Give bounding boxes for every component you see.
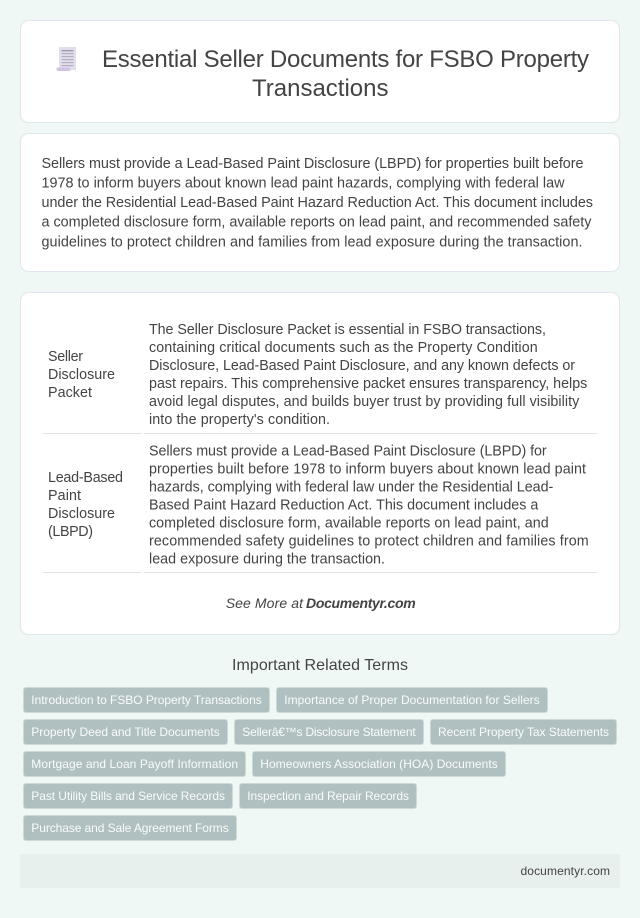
row label: (LBPD) <box>48 524 93 540</box>
tag <box>24 752 246 776</box>
see more link: See More at <box>226 595 304 611</box>
row: lead-based paint disclosure <box>48 443 589 567</box>
row description: containing critical documents such as the Property Condition <box>149 340 538 356</box>
tag: Past Utility Bills and Service Records <box>31 789 225 803</box>
row description: Sellers must provide a Lead-Based Paint Disclosure (LBPD) for <box>149 443 547 459</box>
row: seller disclosure packet <box>48 322 587 428</box>
text block: intro paragraph: a completed disclosure form, available reports on lead paint, and recommended safety <box>42 215 592 231</box>
tag <box>430 720 616 744</box>
row label: Seller <box>48 349 83 365</box>
tag <box>24 784 232 808</box>
panel: document table <box>20 292 620 634</box>
panel: intro <box>20 134 620 272</box>
footer <box>20 854 620 888</box>
see more link <box>226 595 416 611</box>
text block: intro paragraph: guidelines to protect children and families from lead exposure during the transaction. <box>42 234 582 250</box>
panel: header <box>20 20 620 122</box>
tag <box>24 816 236 840</box>
see more link: Documentyr.com <box>306 595 416 611</box>
row description: The Seller Disclosure Packet is essential in FSBO transactions, <box>149 322 546 338</box>
row label: Disclosure <box>48 506 115 522</box>
row description: hazards, complying with federal law under the Residential Lead- <box>149 479 554 495</box>
row label <box>48 470 123 540</box>
row description: recommended safety guidelines to protect children and families from <box>149 533 589 549</box>
row label: Paint <box>48 488 81 504</box>
tag: Homeowners Association (HOA) Documents <box>260 757 498 771</box>
text block: intro paragraph <box>42 156 593 250</box>
row label: Disclosure <box>48 367 115 383</box>
tag: Introduction to FSBO Property Transactions <box>31 693 262 707</box>
tag <box>252 752 506 776</box>
tag <box>24 720 228 744</box>
row description <box>149 322 587 428</box>
text block: intro paragraph: Sellers must provide a Lead-Based Paint Disclosure (LBPD) for properties built before <box>42 156 584 172</box>
row description: completed disclosure form, available reports on lead paint, and <box>149 515 549 531</box>
tag <box>234 720 424 744</box>
tag: Recent Property Tax Statements <box>438 725 609 739</box>
panel: related term tags <box>24 688 616 840</box>
tag: Mortgage and Loan Payoff Information <box>31 757 238 771</box>
tag: Inspection and Repair Records <box>247 789 409 803</box>
row label: Packet <box>48 385 92 401</box>
row description: Disclosure, Lead-Based Paint Disclosure, and any known defects or <box>149 358 575 374</box>
title: Essential Seller Documents for FSBO Property <box>102 46 589 73</box>
tag <box>276 688 548 712</box>
tag: Sellerâ€™s Disclosure Statement <box>242 725 416 739</box>
row description: lead exposure during the transaction. <box>149 551 385 567</box>
heading: important related terms: Important Related Terms <box>232 657 408 674</box>
tag: Property Deed and Title Documents <box>31 725 220 739</box>
row description: into the property's condition. <box>149 412 330 428</box>
row description: properties built before 1978 to inform buyers about known lead paint <box>149 461 586 477</box>
row description: past repairs. This comprehensive packet ensures transparency, helps <box>149 376 587 392</box>
icon: document scroll <box>56 47 76 71</box>
text block: intro paragraph: under the Residential Lead-Based Paint Hazard Reduction Act. This document includes <box>42 195 593 211</box>
tag <box>240 784 416 808</box>
row label <box>48 349 115 401</box>
row description <box>149 443 589 567</box>
title <box>102 46 589 102</box>
footer text: documentyr.com <box>520 864 610 878</box>
tag: Purchase and Sale Agreement Forms <box>31 821 229 835</box>
row label: Lead-Based <box>48 470 123 486</box>
tag <box>24 688 270 712</box>
row description: Based Paint Hazard Reduction Act. This document includes a <box>149 497 538 513</box>
row description: avoid legal disputes, and builds buyer trust by providing full visibility <box>149 394 580 410</box>
text block: intro paragraph: 1978 to inform buyers about known lead paint hazards, complying with federal law <box>42 176 565 192</box>
tag: Importance of Proper Documentation for Sellers <box>284 693 540 707</box>
title: Transactions <box>252 75 388 102</box>
